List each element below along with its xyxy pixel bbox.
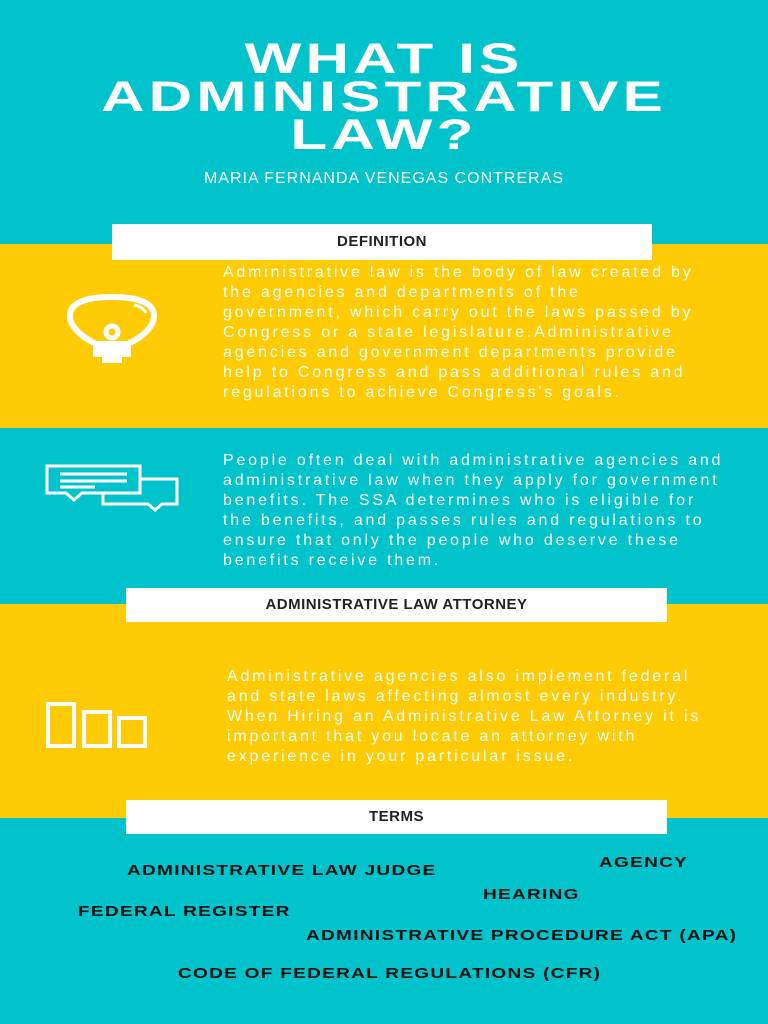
text: benefits: benefits receive them. [223, 552, 441, 569]
title: LAW? [290, 111, 478, 159]
band: attorney yellow [0, 604, 768, 818]
terms list: ADMINISTRATIVE PROCEDURE ACT (APA) [306, 927, 737, 944]
title: ADMINISTRATIVE [101, 73, 667, 121]
heading: administrative law attorney: ADMINISTRATIVE LAW ATTORNEY [265, 596, 528, 613]
text: benefits: the benefits, and passes rules and regulations to [223, 512, 704, 529]
text: benefits: benefits. The SSA determines who is eligible for [223, 492, 696, 509]
title: WHAT IS [244, 35, 524, 83]
terms list [78, 854, 737, 982]
text: benefits [223, 452, 723, 569]
text: attorney: When Hiring an Administrative Law Attorney it is [227, 708, 701, 725]
text: attorney: important that you locate an attorney with [227, 728, 637, 745]
text: benefits: People often deal with administrative agencies and [223, 452, 723, 469]
terms list: HEARING [483, 886, 580, 903]
band: definition yellow [0, 244, 768, 428]
text: attorney [227, 668, 701, 765]
icon: bars [46, 702, 147, 748]
heading: definition: DEFINITION [337, 233, 427, 250]
text: definition: help to Congress and pass additional rules and [223, 364, 685, 381]
terms list: ADMINISTRATIVE LAW JUDGE [127, 862, 437, 879]
heading: administrative law attorney [126, 588, 667, 622]
text: definition: Administrative law is the body of law created by [223, 264, 694, 281]
terms list: FEDERAL REGISTER [78, 903, 291, 920]
subtitle: author: MARIA FERNANDA VENEGAS CONTRERAS [204, 170, 564, 187]
icon: light bulb [67, 294, 157, 363]
text: attorney: experience in your particular issue. [227, 748, 575, 765]
terms list: CODE OF FEDERAL REGULATIONS (CFR) [178, 965, 601, 982]
text: definition: Congress or a state legislature.Administrative [223, 324, 674, 341]
icon: speech bubbles [46, 464, 178, 512]
text: definition: government, which carry out the laws passed by [223, 304, 693, 321]
heading: terms [126, 800, 667, 834]
text: benefits: ensure that only the people who deserve these [223, 532, 681, 549]
heading: terms: TERMS [369, 808, 424, 825]
heading: definition [112, 224, 652, 260]
text: definition [223, 264, 694, 401]
text: attorney: and state laws affecting almost every industry. [227, 688, 684, 705]
title [101, 35, 667, 159]
text: definition: regulations to achieve Congress's goals. [223, 384, 622, 401]
text: definition: the agencies and departments of the [223, 284, 581, 301]
text: definition: agencies and government departments provide [223, 344, 678, 361]
text: benefits: administrative law when they apply for government [223, 472, 720, 489]
text: attorney: Administrative agencies also implement federal [227, 668, 690, 685]
terms list: AGENCY [599, 854, 688, 871]
